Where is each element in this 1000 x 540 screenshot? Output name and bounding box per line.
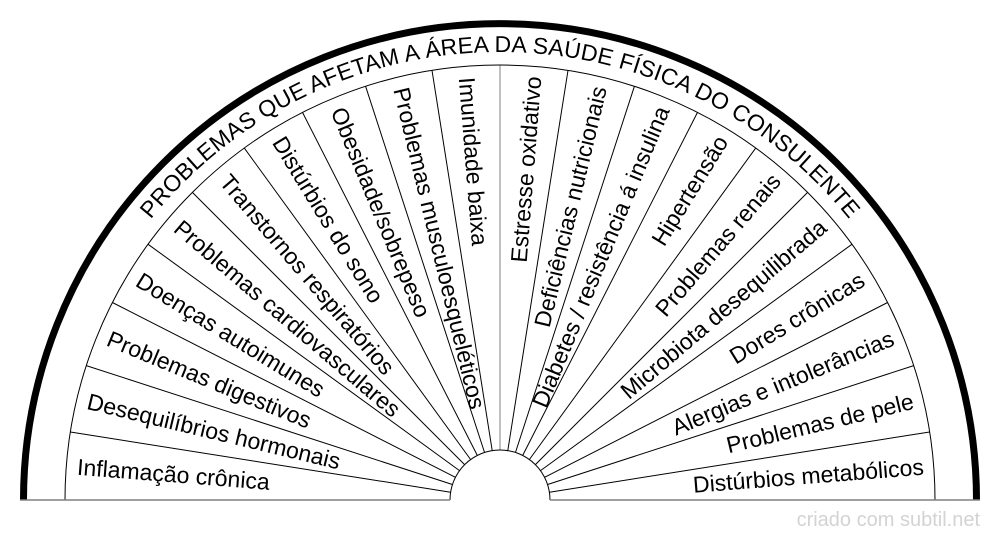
label: Problemas digestivos: Problemas digestivos (103, 326, 315, 433)
label: Desequilíbrios hormonais: Desequilíbrios hormonais (85, 388, 343, 474)
label: Transtornos respiratórios: Transtornos respiratórios (215, 169, 400, 380)
title: PROBLEMAS QUE AFETAM A ÁREA DA SAÚDE FÍSICA DO CONSULENTE (140, 36, 860, 218)
label: Diabetes / resistência á insulina: Diabetes / resistência á insulina (527, 102, 675, 411)
label: Problemas musculoesqueléticos: Problemas musculoesqueléticos (388, 85, 491, 411)
label: Hipertensão: Hipertensão (646, 131, 733, 250)
sector labels (76, 75, 925, 498)
label: Dores crônicas: Dores crônicas (725, 267, 869, 369)
label: Deficiências nutricionais: Deficiências nutricionais (529, 84, 612, 330)
label: Imunidade baixa: Imunidade baixa (454, 76, 493, 247)
label: Alergias e intolerâncias: Alergias e intolerâncias (668, 325, 898, 440)
label: Obesidade/sobrepeso: Obesidade/sobrepeso (326, 103, 436, 321)
base line left (20, 499, 450, 501)
label: Problemas cardiovasculares: Problemas cardiovasculares (169, 215, 406, 422)
label: Problemas de pele: Problemas de pele (724, 388, 916, 458)
base line right (550, 499, 980, 501)
label: Inflamação crônica: Inflamação crônica (76, 454, 271, 495)
label: Problemas renais: Problemas renais (650, 168, 786, 321)
label: Doenças autoimunes: Doenças autoimunes (132, 267, 330, 402)
label: Microbiota desequilibrada: Microbiota desequilibrada (615, 214, 832, 404)
inner arc (65, 65, 935, 500)
sector dividers (70, 65, 930, 492)
label: Distúrbios metabólicos: Distúrbios metabólicos (692, 454, 925, 498)
credit: criado com subtil.net (797, 509, 980, 531)
label: Estresse oxidativo: Estresse oxidativo (506, 75, 546, 263)
label: Distúrbios do sono: Distúrbios do sono (267, 132, 389, 308)
hub arc (450, 450, 550, 500)
